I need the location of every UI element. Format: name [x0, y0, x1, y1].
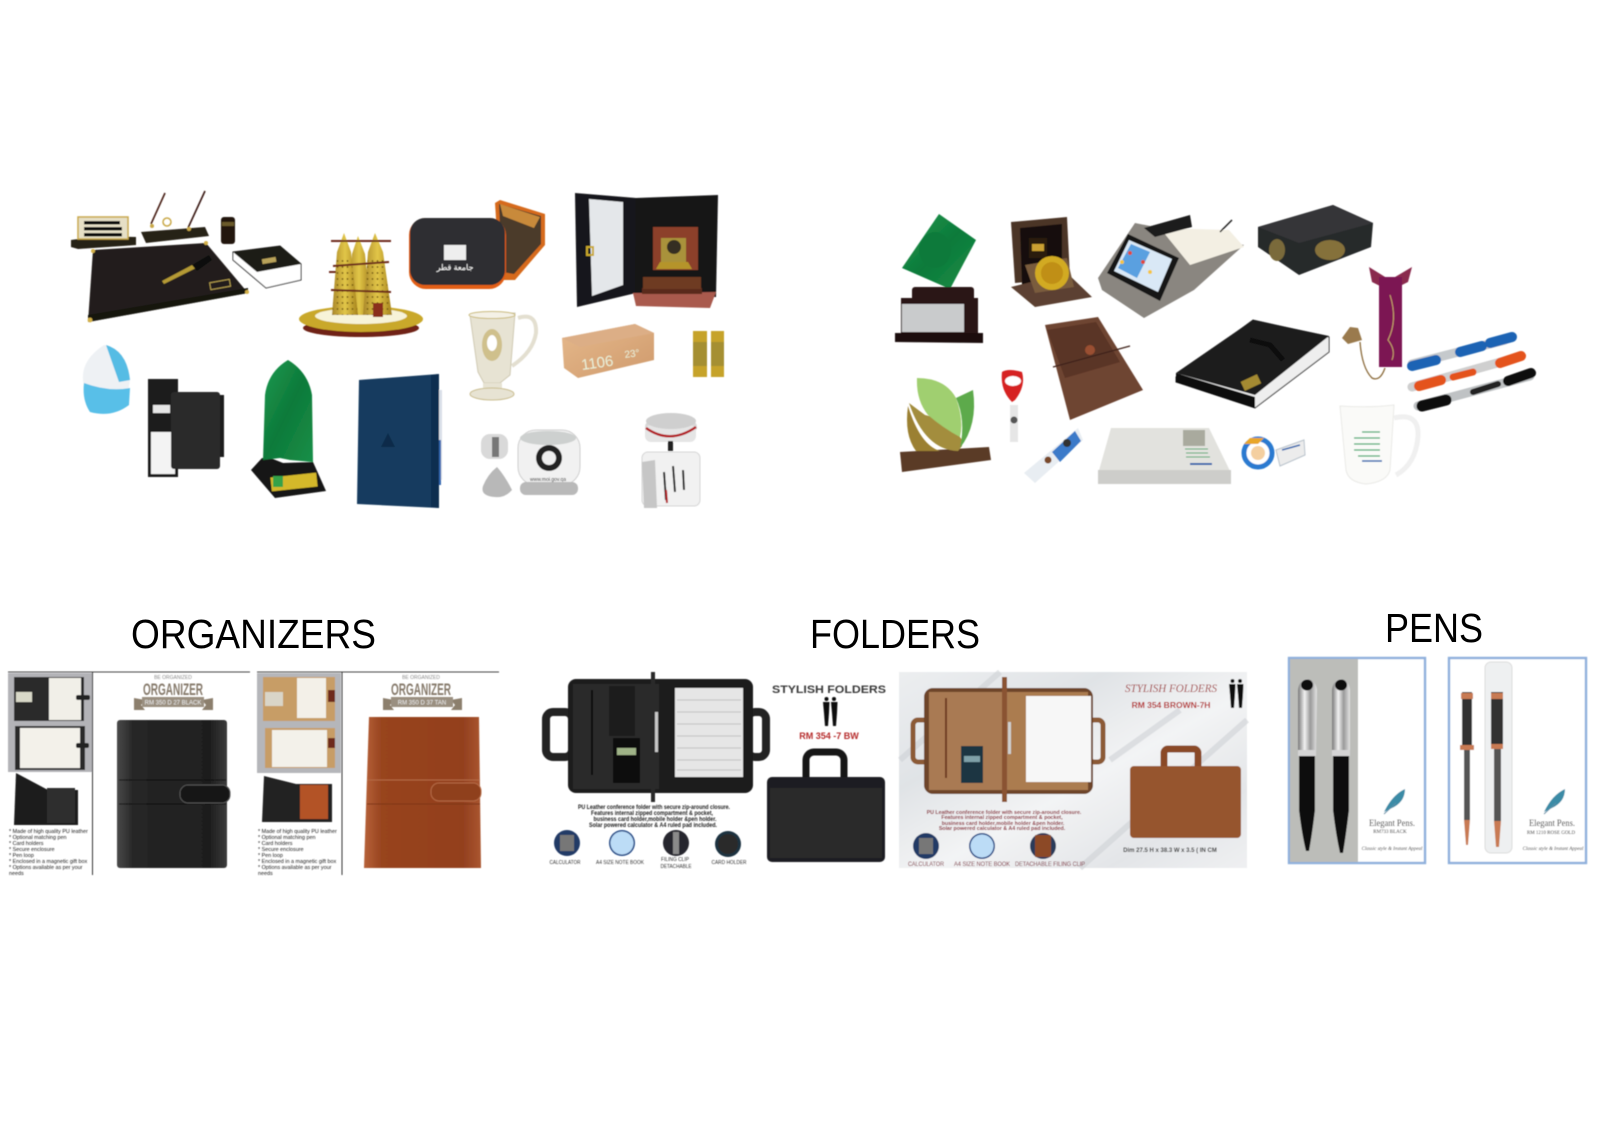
feature list: [258, 829, 337, 877]
feather and caption: Classic style & Instant Appeal: [1523, 847, 1584, 852]
folder description: PU Leather conference folder with secure zip-around closure.: [927, 810, 1082, 816]
folder description: Features internal zipped compartment & pocket,: [591, 811, 713, 817]
folder description: [927, 810, 1082, 832]
wooden LED clock: 1106: [580, 353, 615, 374]
brown folder closed: Dim 27.5 H x 38.3 W x 3.5 ( IN CM: [1123, 848, 1217, 854]
white speaker set: www.moi.gov.qa: [530, 477, 566, 483]
feature labels: FILING CLIP: [661, 857, 689, 863]
feather and caption: [1362, 789, 1423, 852]
tablet folder: [1098, 215, 1244, 318]
green crystal trophy: [895, 214, 983, 343]
organizer title: ORGANIZER: [143, 680, 203, 699]
panel: black organizer: [8, 672, 250, 877]
feature list: * Pen loop: [9, 853, 34, 859]
feature list: * Secure enclosure: [9, 847, 55, 853]
black leather organizer: [117, 720, 230, 868]
feature icons: [913, 833, 1056, 859]
organizer title: [134, 675, 213, 710]
black notebook: [1176, 320, 1329, 408]
panel: rose gold pens: [1449, 658, 1586, 863]
stylish folders title: RM 354 -7 BW: [799, 731, 859, 741]
photo: open organizer: [8, 673, 92, 825]
pen one: [1460, 692, 1474, 845]
feature list: * Card holders: [9, 841, 44, 847]
open brown folder: [913, 677, 1103, 802]
stylish folders title: STYLISH FOLDERS: [772, 684, 886, 696]
feature list: * Card holders: [258, 841, 293, 847]
feature list: * Optional matching pen: [258, 835, 316, 841]
three USB pens: [1412, 337, 1531, 406]
feature list: * Enclosed in a magnetic gift box: [258, 859, 337, 865]
panel: black folder: [546, 672, 886, 870]
brown folder closed: [1123, 749, 1241, 854]
black jotter wallet: [148, 379, 224, 477]
navy notebook: [357, 374, 442, 508]
feather and caption: RM733 BLACK: [1373, 830, 1407, 835]
tan leather organizer: [364, 717, 481, 868]
feature list: * Enclosed in a magnetic gift box: [9, 859, 88, 865]
heading: PENS: PENS: [1385, 605, 1483, 651]
black folder closed: [767, 752, 885, 862]
maroon bookmark with tassel: [1342, 267, 1412, 379]
feature list: * Pen loop: [258, 853, 283, 859]
feature list: * Options available as per your: [258, 865, 332, 871]
feather and caption: [1523, 789, 1584, 852]
feature labels: A4 SIZE NOTE BOOK: [596, 860, 644, 866]
desk set: [71, 191, 301, 322]
red lanyard badge reel: [1002, 370, 1023, 442]
organizer title: RM 350 D 27 BLACK: [145, 700, 201, 706]
feature list: * Optional matching pen: [9, 835, 67, 841]
feature labels: CALCULATOR: [550, 860, 580, 866]
folder description: [578, 805, 730, 829]
feature list: needs: [9, 871, 24, 877]
stylish folders title: RM 354 BROWN-7H: [1132, 700, 1210, 710]
orange travel case: جامعة قطر: [436, 263, 473, 272]
gold medal box: [1011, 217, 1092, 307]
white power bank: [1098, 428, 1231, 484]
colourful character USB: [1244, 438, 1305, 467]
feature icons: [554, 830, 741, 857]
cream mug: [469, 312, 536, 400]
feature list: * Options available as per your: [9, 865, 83, 871]
pen two: [1491, 692, 1503, 847]
feature labels: [908, 861, 1085, 868]
panel: tan organizer: [257, 672, 499, 877]
wooden LED clock: 23°: [624, 348, 640, 361]
feature list: [9, 829, 88, 877]
organizer title: ORGANIZER: [391, 680, 451, 699]
open black folder: [546, 672, 766, 802]
folder description: Features internal zipped compartment & pocket,: [941, 815, 1063, 821]
panel: product collage left: [71, 191, 724, 508]
feature labels: CARD HOLDER: [712, 860, 746, 866]
feather and caption: RM 1210 ROSE GOLD: [1527, 831, 1575, 836]
feature labels: DETACHABLE FILING CLIP: [1015, 861, 1085, 868]
stylish folders title: [1125, 679, 1244, 710]
leather notebook: [1045, 317, 1143, 420]
green arch trophy: [251, 360, 326, 498]
orange travel case: [409, 200, 545, 289]
wooden LED clock: [562, 324, 654, 378]
gold cylinders: [693, 331, 724, 377]
feather and caption: Classic style & Instant Appeal: [1362, 847, 1423, 852]
heading: ORGANIZERS: ORGANIZERS: [131, 611, 376, 657]
heading: FOLDERS: FOLDERS: [810, 611, 980, 657]
black presentation box: [575, 193, 718, 308]
stylish folders title: [772, 684, 886, 741]
feature labels: [550, 857, 746, 870]
feature list: * Made of high quality PU leather: [9, 829, 88, 835]
organizer title: BE ORGANIZED: [154, 675, 192, 681]
gold towers award: [299, 233, 423, 337]
black gift box: [1258, 205, 1373, 275]
feature list: * Secure enclosure: [258, 847, 304, 853]
folder description: Solar powered calculator & A4 ruled pad included.: [939, 826, 1066, 832]
pen two: [1332, 679, 1350, 853]
panel: product collage right: [895, 205, 1531, 484]
panel: brown folder on marble: [899, 672, 1247, 868]
feather and caption: Elegant Pens.: [1529, 818, 1575, 828]
folder description: business card holder,mobile holder &pen holder.: [594, 817, 717, 823]
folder description: Solar powered calculator & A4 ruled pad included.: [589, 823, 717, 829]
feature labels: A4 SIZE NOTE BOOK: [954, 861, 1011, 868]
blue USB drive: [1024, 428, 1083, 483]
organizer title: BE ORGANIZED: [402, 675, 440, 681]
folder description: PU Leather conference folder with secure zip-around closure.: [578, 805, 730, 811]
green leaf trophy: [900, 378, 991, 472]
pen one: [1298, 679, 1317, 851]
feather and caption: Elegant Pens.: [1369, 818, 1415, 828]
travel adapter: [642, 413, 700, 508]
feature list: * Made of high quality PU leather: [258, 829, 337, 835]
organizer title: [383, 675, 462, 710]
photo: open tan organizer: [257, 673, 341, 822]
blue and white cap: [83, 345, 130, 414]
feature labels: CALCULATOR: [908, 861, 944, 868]
feature labels: DETACHABLE: [660, 864, 692, 870]
white mug: [1340, 405, 1418, 484]
white speaker set: [481, 430, 580, 497]
organizer title: RM 350 D 37 TAN: [398, 700, 446, 706]
stylish folders title: STYLISH FOLDERS: [1125, 681, 1217, 695]
folder description: business card holder,mobile holder &pen holder.: [942, 821, 1065, 827]
feature list: needs: [258, 871, 273, 877]
panel: black pens: [1289, 658, 1425, 863]
